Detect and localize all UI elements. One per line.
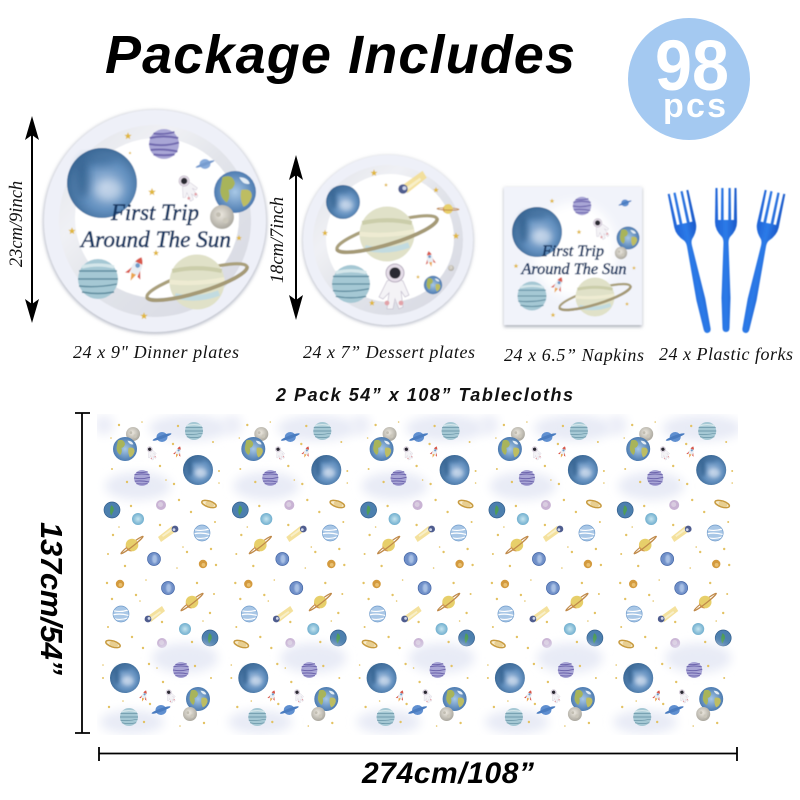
arrow: dessert plate height xyxy=(289,155,303,320)
badge: 98 pcs: 98 xyxy=(655,27,729,106)
label: 23cm/9inch: 23cm/9inch xyxy=(7,181,27,267)
napkin text xyxy=(520,243,626,278)
planet: blue xyxy=(67,148,137,218)
planet: small ringed xyxy=(195,159,215,169)
caption: dessert plates: 24 x 7” Dessert plates xyxy=(303,342,475,362)
icon: astronaut xyxy=(379,264,409,309)
planet: earth xyxy=(424,276,442,294)
planet: teal xyxy=(332,265,370,303)
plate text: Around The Sun xyxy=(79,227,231,252)
panel: dinner plate xyxy=(43,110,267,334)
icon: astronaut xyxy=(589,216,612,241)
planet: blue xyxy=(326,185,360,219)
badge: 98 pcs xyxy=(628,18,750,140)
icon: rocket xyxy=(423,250,437,268)
planet: teal xyxy=(78,259,118,299)
label: 18cm/7inch: 18cm/7inch xyxy=(268,197,288,283)
label: 274cm/108: 274cm/108” xyxy=(361,757,534,790)
badge: 98 pcs: pcs xyxy=(663,87,726,125)
label: 137cm/54: 137cm/54” xyxy=(34,522,69,676)
planet: moon xyxy=(615,247,627,259)
planet: moon xyxy=(448,265,454,271)
planet: small xyxy=(618,200,632,206)
planet: earth xyxy=(214,171,256,213)
comet xyxy=(398,171,427,194)
panel: napkin xyxy=(504,187,642,327)
napkin text: Around The Sun xyxy=(520,261,626,278)
planet: saturn xyxy=(557,278,633,316)
icon: rocket xyxy=(123,254,149,284)
icon: astronaut xyxy=(174,173,201,204)
stars xyxy=(514,198,636,317)
stars xyxy=(68,132,242,319)
plate text: First Trip xyxy=(110,200,199,225)
panel: dessert plate xyxy=(302,155,474,326)
caption: forks: 24 x Plastic forks xyxy=(659,344,793,364)
dimension: tablecloth height xyxy=(75,413,90,733)
heading: tablecloths: 2 Pack 54” x 108” Tablecloths xyxy=(275,385,573,405)
stars xyxy=(322,169,459,306)
panel: tablecloth pattern xyxy=(94,414,742,735)
planet: earth xyxy=(616,226,640,250)
napkin text: First Trip xyxy=(541,243,604,260)
arrow: dinner plate height xyxy=(25,116,39,323)
planet: saturn xyxy=(144,254,250,310)
caption: napkins: 24 x 6.5” Napkins xyxy=(504,345,644,365)
planet: moon xyxy=(210,205,234,229)
title: Package Includes xyxy=(105,25,575,85)
planet: teal xyxy=(518,282,546,310)
caption: dinner plates: 24 x 9" Dinner plates xyxy=(73,342,239,362)
planet: purple xyxy=(573,197,591,215)
planet: saturn xyxy=(334,206,440,262)
icon: plastic forks xyxy=(667,188,786,335)
dimension: tablecloth width xyxy=(99,747,737,761)
plate text xyxy=(79,200,231,252)
planet: purple xyxy=(149,129,179,159)
icon: rocket xyxy=(549,275,567,295)
planet: small gold xyxy=(436,197,460,221)
planet: blue xyxy=(512,207,562,257)
